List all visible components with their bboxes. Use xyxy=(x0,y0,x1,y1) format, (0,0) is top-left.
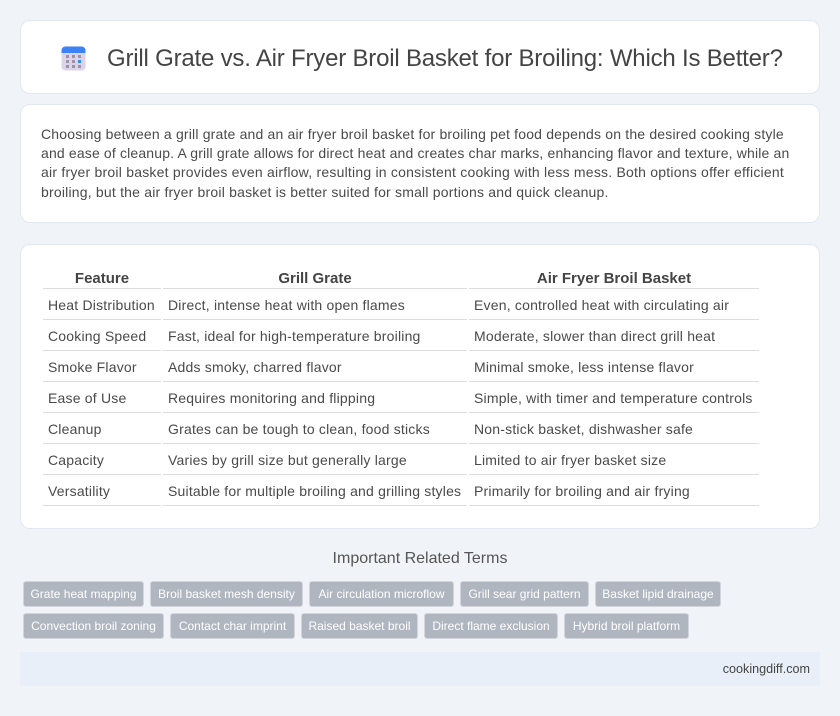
related term tags: Broil basket mesh density xyxy=(158,587,295,601)
title: Grill Grate vs. Air Fryer Broil Basket for Broiling: Which Is Better? xyxy=(107,45,783,72)
comparison table: Cleanup xyxy=(48,421,102,437)
intro text: air fryer broil basket provides even airflow, resulting in consistent cooking with less mess. Both options offer efficient xyxy=(41,164,784,180)
comparison table: Direct, intense heat with open flames xyxy=(168,297,405,313)
related term tags: Raised basket broil xyxy=(308,619,411,633)
comparison table: Grill Grate xyxy=(278,270,352,287)
comparison table: Even, controlled heat with circulating air xyxy=(474,297,729,313)
footer source: cookingdiff.com xyxy=(723,662,810,676)
related term tags: Direct flame exclusion xyxy=(432,619,550,633)
footer bar xyxy=(20,652,820,686)
comparison table: Adds smoky, charred flavor xyxy=(168,359,342,375)
comparison table: Capacity xyxy=(48,452,104,468)
related term tags xyxy=(23,581,721,639)
comparison table: Suitable for multiple broiling and grilling styles xyxy=(168,483,461,499)
panel: title header xyxy=(20,20,820,94)
comparison table: Non-stick basket, dishwasher safe xyxy=(474,421,693,437)
related term tags: Convection broil zoning xyxy=(31,619,156,633)
comparison table: Grates can be tough to clean, food sticks xyxy=(168,421,430,437)
related term tags: Air circulation microflow xyxy=(318,587,445,601)
intro text: Choosing between a grill grate and an air fryer broil basket for broiling pet food depends on the desired cooking style xyxy=(41,126,784,142)
comparison table: Minimal smoke, less intense flavor xyxy=(474,359,694,375)
comparison table xyxy=(43,270,759,506)
comparison table: Feature xyxy=(75,270,129,287)
comparison table: Primarily for broiling and air frying xyxy=(474,483,690,499)
comparison table: Smoke Flavor xyxy=(48,359,137,375)
comparison table: Limited to air fryer basket size xyxy=(474,452,666,468)
related term tags: Hybrid broil platform xyxy=(573,619,680,633)
related term tags: Basket lipid drainage xyxy=(602,587,714,601)
comparison table: Requires monitoring and flipping xyxy=(168,390,375,406)
related term tags: Contact char imprint xyxy=(179,619,286,633)
panel: introduction xyxy=(20,104,820,223)
panel: comparison table xyxy=(20,244,820,529)
comparison table: Cooking Speed xyxy=(48,328,146,344)
icon: calendar xyxy=(62,46,86,70)
heading: related terms: Important Related Terms xyxy=(333,550,507,567)
comparison table: Fast, ideal for high-temperature broiling xyxy=(168,328,421,344)
comparison table: Versatility xyxy=(48,483,110,499)
comparison table: Moderate, slower than direct grill heat xyxy=(474,328,715,344)
comparison table: Heat Distribution xyxy=(48,297,155,313)
comparison table: Simple, with timer and temperature controls xyxy=(474,390,753,406)
related term tags: Grill sear grid pattern xyxy=(468,587,581,601)
intro text: and ease of cleanup. A grill grate allows for direct heat and creates char marks, enhancing flavor and texture, while an xyxy=(41,145,789,161)
intro text: broiling, but the air fryer broil basket is better suited for small portions and quick cleanup. xyxy=(41,184,609,200)
comparison table: Ease of Use xyxy=(48,390,126,406)
comparison table: Varies by grill size but generally large xyxy=(168,452,407,468)
related term tags: Grate heat mapping xyxy=(30,587,137,601)
intro text xyxy=(41,126,789,200)
comparison table: Air Fryer Broil Basket xyxy=(537,270,691,287)
